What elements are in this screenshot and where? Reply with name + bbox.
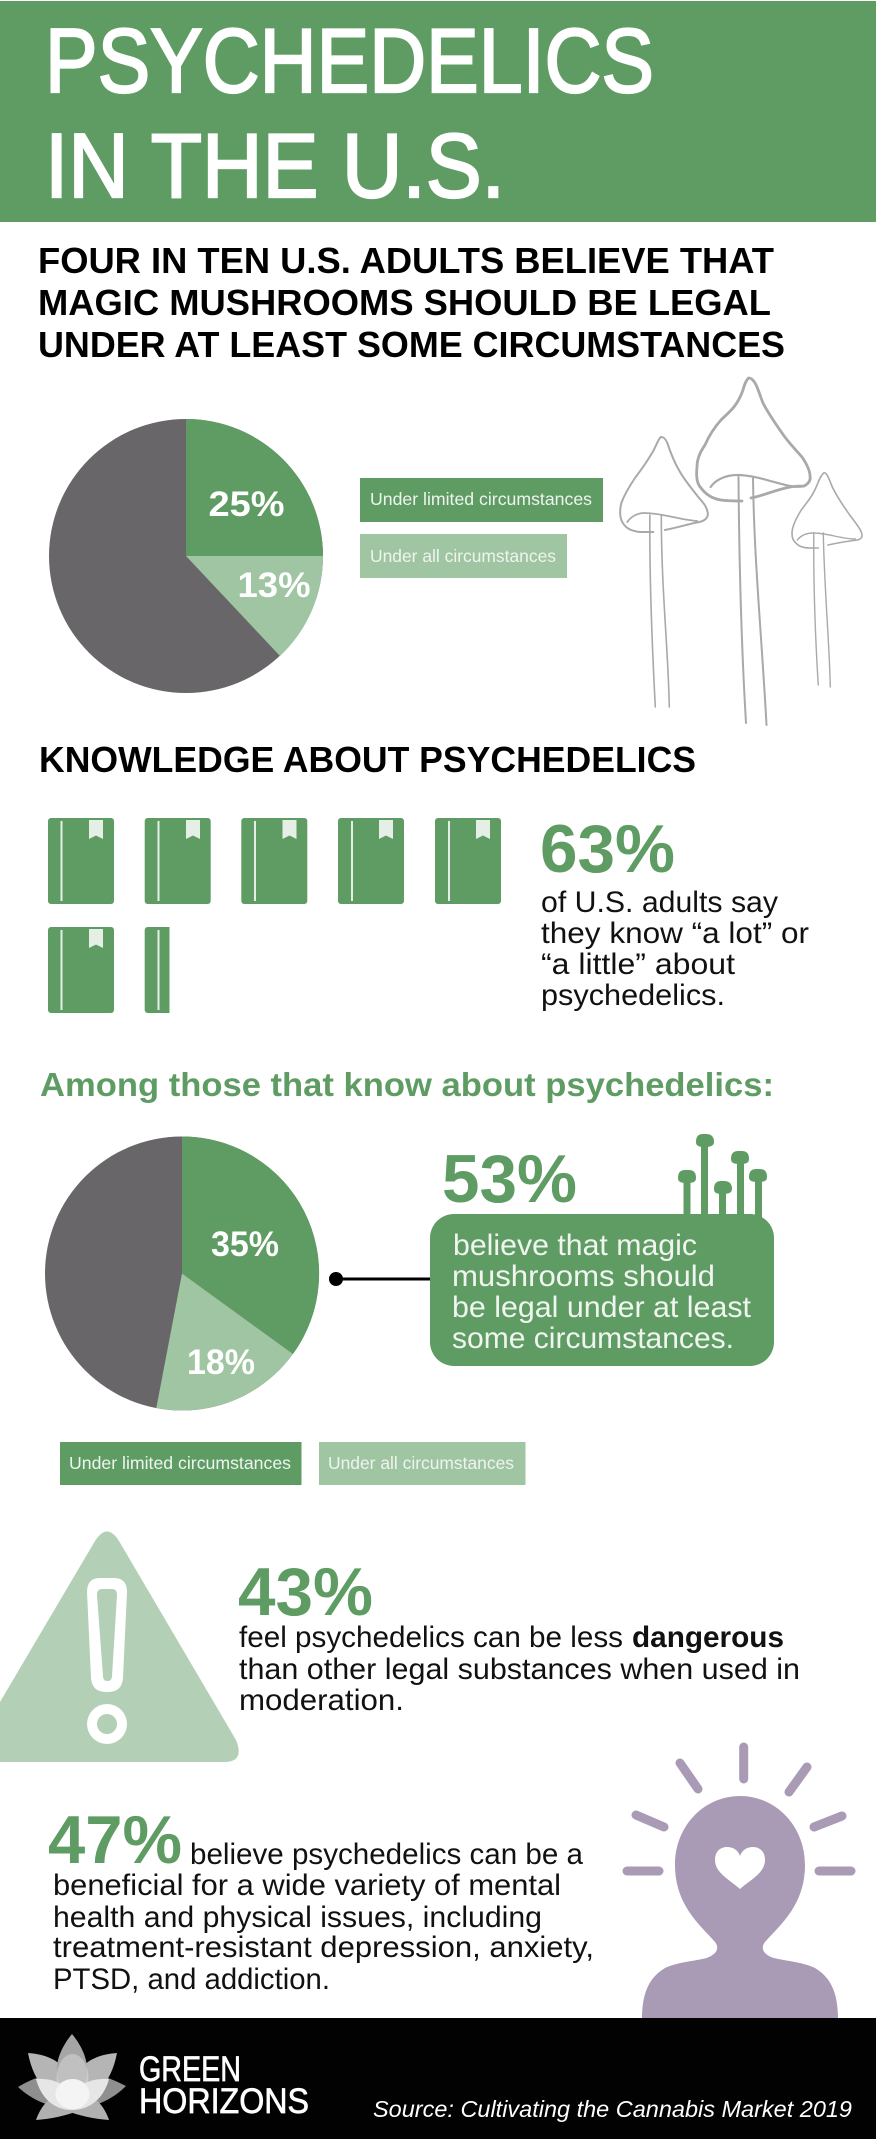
callout: 53% description <box>430 1214 774 1366</box>
text: 43% description: moderation. <box>239 1684 404 1717</box>
book 4 <box>338 818 404 904</box>
text: 47% description: beneficial for a wide variety of mental <box>53 1869 561 1902</box>
pie label 25%: 25% <box>208 485 284 524</box>
heading: four in ten: FOUR IN TEN U.S. ADULTS BELIEVE THAT <box>38 240 774 281</box>
logo wordmark: GREEN <box>139 2050 241 2089</box>
heading: among those that know: Among those that know about psychedelics: <box>40 1066 774 1103</box>
pie label 18%: 18% <box>187 1343 255 1382</box>
text: 47% description <box>53 1838 594 1996</box>
title banner <box>0 1 876 222</box>
text: 47% description: treatment-resistant depression, anxiety, <box>53 1931 594 1964</box>
logo wordmark <box>139 2050 309 2121</box>
title text: IN THE U.S. <box>45 116 505 217</box>
partial book 7 <box>145 927 170 1013</box>
title text <box>45 11 654 217</box>
text: 63% description <box>541 886 809 1012</box>
pie chart: among those that know <box>45 1136 319 1410</box>
stat: 47%: 47% <box>48 1802 182 1878</box>
text: 63% description: they know “a lot” or <box>541 917 809 950</box>
legend: under limited circumstances (second chart): Under limited circumstances <box>69 1453 291 1473</box>
heading: four in ten <box>38 240 785 365</box>
text: 47% description: believe psychedelics can be a <box>190 1838 583 1871</box>
title text: PSYCHEDELICS <box>45 11 654 112</box>
text: 43% description: feel psychedelics can be less <box>239 1621 623 1654</box>
pie label 35%: 35% <box>211 1225 279 1264</box>
footer bar <box>0 2018 876 2139</box>
connector line <box>329 1272 431 1286</box>
legend: under all circumstances (second chart): Under all circumstances <box>328 1453 514 1473</box>
text: 63% description: “a little” about <box>541 948 736 981</box>
legend: under limited circumstances: Under limited circumstances <box>370 489 592 509</box>
legend: under all circumstances <box>360 534 567 578</box>
text: 63% description: of U.S. adults say <box>541 886 778 919</box>
book 5 <box>435 818 501 904</box>
callout: 53% description: believe that magic <box>453 1229 697 1262</box>
icon: warning triangle <box>0 1532 239 1762</box>
callout: 53% description: mushrooms should <box>452 1260 715 1293</box>
book 3 <box>241 818 307 904</box>
callout: 53% description: be legal under at least <box>452 1291 752 1324</box>
icon: small mushrooms on callout <box>678 1134 767 1218</box>
text: 43% description: than other legal substances when used in <box>239 1653 800 1686</box>
pie chart: legality overall <box>49 419 323 693</box>
icon: lotus logo <box>18 2034 126 2120</box>
text: 63% description: psychedelics. <box>541 979 725 1012</box>
text: 43% description <box>239 1621 800 1717</box>
icon: person with heart and rays <box>627 1747 851 2019</box>
legend: under limited circumstances <box>360 478 603 522</box>
legend: under all circumstances (second chart) <box>319 1442 526 1485</box>
text: 47% description: health and physical issues, including <box>53 1901 542 1934</box>
stat: 63%: 63% <box>540 811 675 887</box>
legend: under all circumstances: Under all circumstances <box>370 546 556 566</box>
callout: 53% description: some circumstances. <box>452 1322 734 1355</box>
icon: line-drawn mushrooms <box>620 378 862 725</box>
stat: 43%: 43% <box>238 1554 373 1630</box>
source line: Source: Cultivating the Cannabis Market 2019 <box>373 2096 852 2122</box>
rays <box>627 1747 851 1871</box>
text: 43% description: dangerous <box>632 1621 784 1654</box>
legend: under limited circumstances (second chart) <box>60 1442 302 1485</box>
book 1 <box>48 818 114 904</box>
book 6 <box>48 927 114 1013</box>
logo wordmark: HORIZONS <box>139 2082 309 2121</box>
pie label 13%: 13% <box>238 566 310 605</box>
heading: four in ten: UNDER AT LEAST SOME CIRCUMSTANCES <box>38 324 785 365</box>
book 2 <box>145 818 211 904</box>
heading: knowledge about psychedelics: KNOWLEDGE ABOUT PSYCHEDELICS <box>39 739 696 780</box>
text: 47% description: PTSD, and addiction. <box>53 1963 330 1996</box>
icon row: books representing 63% <box>48 818 501 1013</box>
heading: four in ten: MAGIC MUSHROOMS SHOULD BE LEGAL <box>38 282 771 323</box>
stat: 53%: 53% <box>442 1141 577 1217</box>
